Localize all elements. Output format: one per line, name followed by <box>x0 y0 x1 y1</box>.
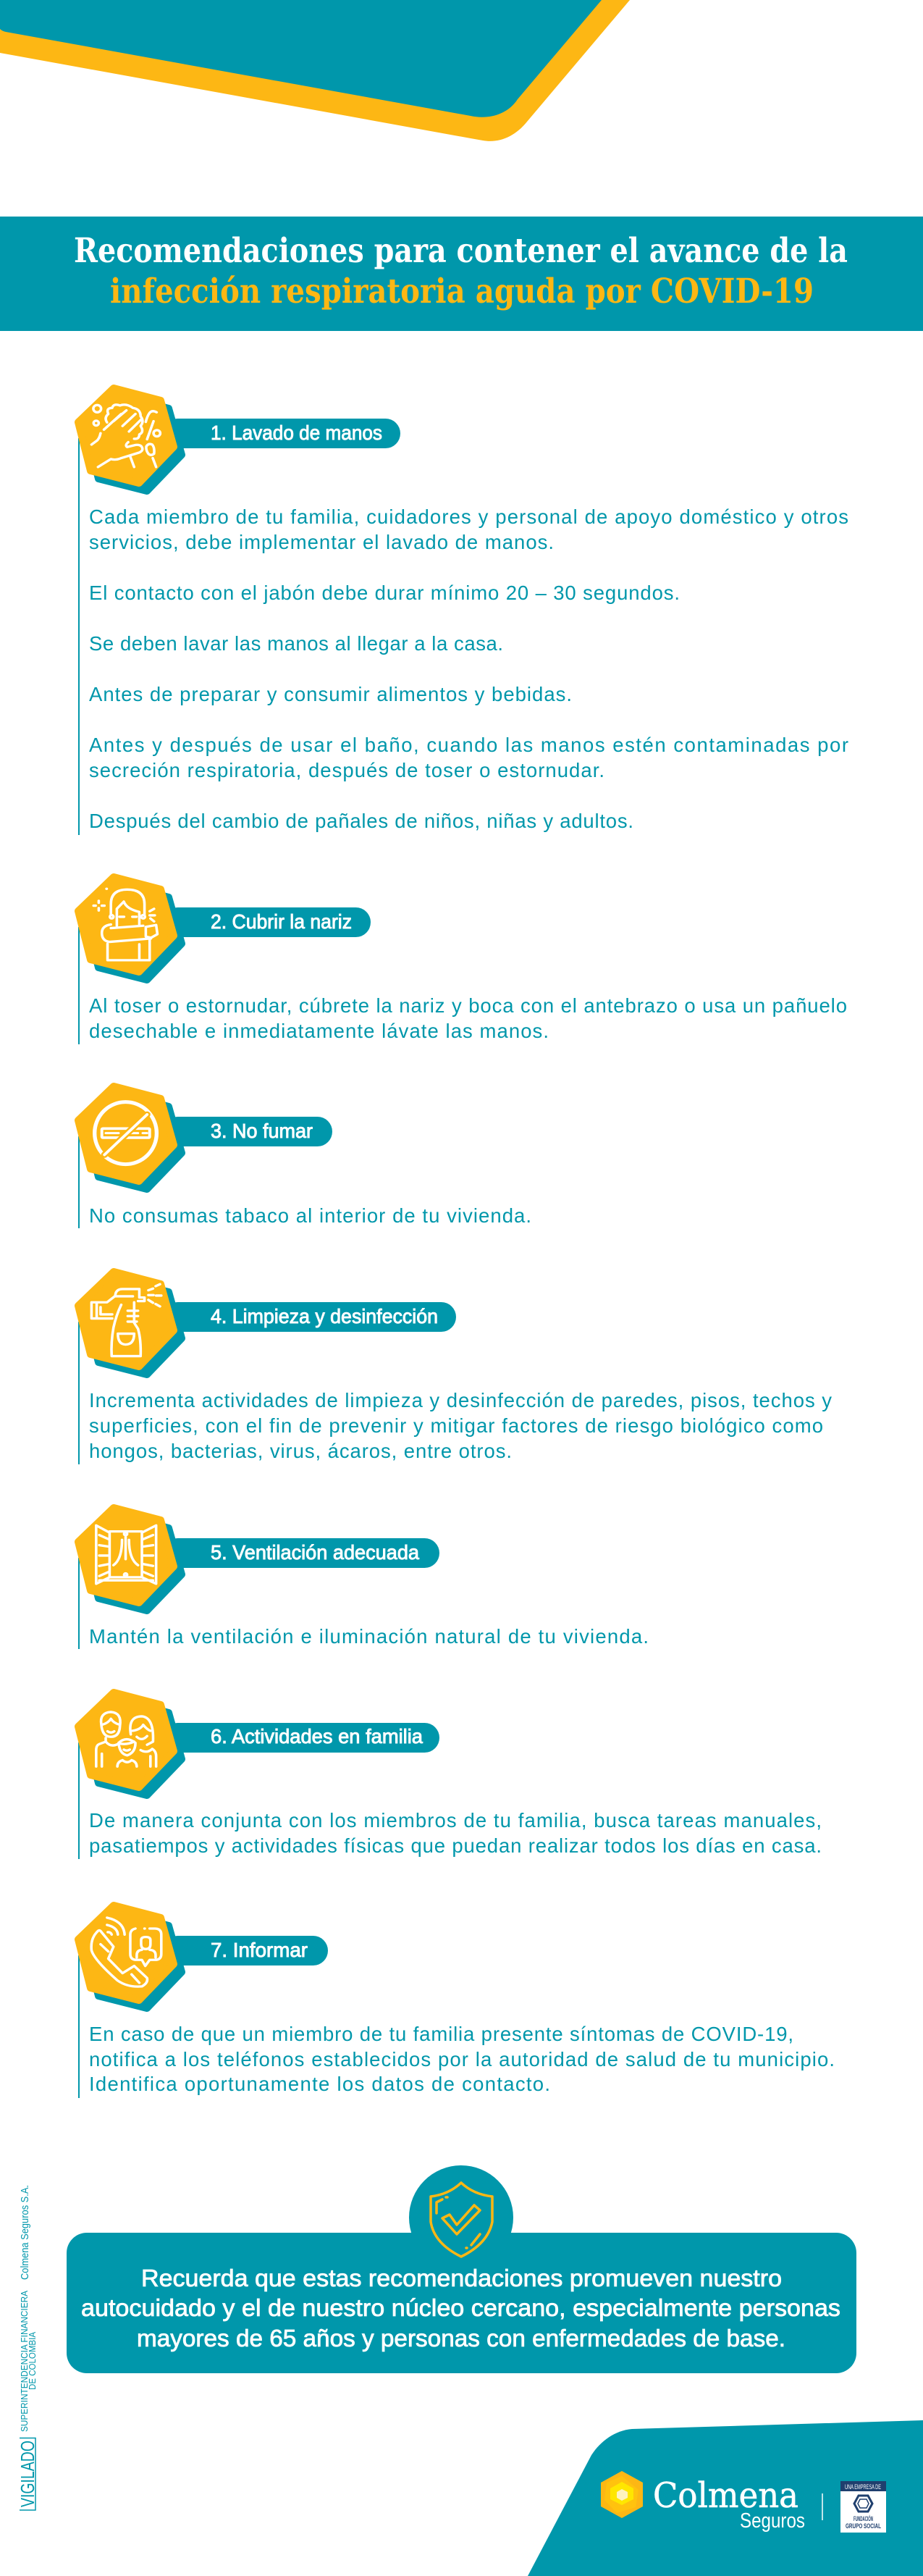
text block: Informar: notifica a los teléfonos establecidos por la autoridad de salud de tu municipio. <box>89 2048 835 2071</box>
panel: 6. Actividades en familia <box>78 1692 822 1859</box>
badge: section 1 hexagon and pill <box>78 388 400 491</box>
icon: phone and contact <box>91 1918 161 1986</box>
heading: Lavado de manos: 1. Lavado de manos <box>211 421 382 444</box>
legal text: vigilado: Colmena Seguros S.A. <box>19 2185 31 2280</box>
text block: Ventilación adecuada: Mantén la ventilación e iluminación natural de tu vivienda. <box>89 1625 649 1648</box>
icon: no smoking <box>95 1102 156 1165</box>
legal text: vigilado: VIGILADO <box>17 2441 38 2507</box>
panel: 5. Ventilación adecuada <box>78 1508 649 1649</box>
text block: Informar: Identifica oportunamente los datos de contacto. <box>89 2073 550 2095</box>
decorative top corner shape <box>0 0 630 141</box>
text block: Limpieza y desinfección: hongos, bacterias, virus, ácaros, entre otros. <box>89 1440 512 1462</box>
badge: section 5 hexagon and pill <box>78 1508 439 1611</box>
callout: closing reminder <box>67 2165 856 2373</box>
text block: Cubrir la nariz: Al toser o estornudar, cúbrete la nariz y boca con el antebrazo o usa un pañuelo <box>89 994 847 1017</box>
text block: Informar: En caso de que un miembro de tu familia presente síntomas de COVID-19, <box>89 2023 793 2045</box>
text block: Actividades en familia: pasatiempos y actividades físicas que puedan realizar todos los días en casa. <box>89 1834 822 1857</box>
text block: Cubrir la nariz <box>89 994 847 1042</box>
text block: Lavado de manos: servicios, debe implementar el lavado de manos. <box>89 531 554 553</box>
text block: Limpieza y desinfección <box>89 1389 832 1462</box>
text block: Lavado de manos <box>89 505 848 832</box>
text block: Actividades en familia <box>89 1809 822 1857</box>
logo: Fundación Grupo Social <box>840 2481 886 2533</box>
logo: Fundación Grupo Social: FUNDACIÓN <box>854 2514 873 2522</box>
text block: Informar <box>89 2023 835 2095</box>
icon: spray bottle <box>91 1284 161 1356</box>
logo: Colmena Seguros <box>601 2471 805 2533</box>
heading: Ventilación adecuada: 5. Ventilación adecuada <box>211 1541 420 1564</box>
icon: family <box>96 1712 156 1766</box>
logo: Fundación Grupo Social: UNA EMPRESA DE <box>845 2483 881 2491</box>
icon: open window <box>96 1525 156 1584</box>
legal text: vigilado: DE COLOMBIA <box>28 2331 38 2390</box>
text block: Lavado de manos: secreción respiratoria, después de toser o estornudar. <box>89 759 604 781</box>
heading: Actividades en familia: 6. Actividades en familia <box>211 1725 423 1748</box>
title banner: infección respiratoria aguda por COVID-19 <box>110 272 814 311</box>
text block: Lavado de manos: Después del cambio de pañales de niños, niñas y adultos. <box>89 810 633 832</box>
text block: Lavado de manos: El contacto con el jabón debe durar mínimo 20 – 30 segundos. <box>89 582 680 604</box>
panel: 7. Informar <box>78 1905 835 2098</box>
footer corner with logos <box>528 2420 923 2576</box>
text block: No fumar: No consumas tabaco al interior de tu vivienda. <box>89 1204 531 1227</box>
text block: Limpieza y desinfección: superficies, con el fin de prevenir y mitigar factores de riesgo biológico como <box>89 1414 823 1437</box>
badge: section 7 hexagon and pill <box>78 1905 328 2008</box>
heading: Limpieza y desinfección: 4. Limpieza y desinfección <box>211 1305 438 1327</box>
text block: reminder message: autocuidado y el de nuestro núcleo cercano, especialmente personas <box>81 2294 840 2321</box>
logo: Colmena Seguros: Colmena <box>653 2475 798 2516</box>
text block: Cubrir la nariz: desechable e inmediatamente lávate las manos. <box>89 1020 549 1042</box>
legal text: vigilado: SUPERINTENDENCIA FINANCIERA <box>20 2290 30 2432</box>
icon: shield with check <box>431 2183 492 2257</box>
text block: reminder message <box>81 2265 840 2351</box>
text block: Lavado de manos: Antes de preparar y consumir alimentos y bebidas. <box>89 683 572 705</box>
logo: Colmena Seguros: Seguros <box>740 2509 805 2533</box>
badge: section 4 hexagon and pill <box>78 1272 456 1375</box>
icon: washing hands <box>91 405 160 467</box>
text block: Actividades en familia: De manera conjunta con los miembros de tu familia, busca tareas manuales, <box>89 1809 822 1832</box>
text block: Limpieza y desinfección: Incrementa actividades de limpieza y desinfección de paredes, pisos, techos y <box>89 1389 832 1411</box>
heading: Cubrir la nariz: 2. Cubrir la nariz <box>211 910 352 933</box>
panel: 1. Lavado de manos <box>78 388 848 835</box>
panel: 4. Limpieza y desinfección <box>78 1272 832 1464</box>
text block: reminder message: Recuerda que estas recomendaciones promueven nuestro <box>141 2265 782 2291</box>
badge: section 6 hexagon and pill <box>78 1692 439 1795</box>
panel: 2. Cubrir la nariz <box>78 877 847 1044</box>
heading: No fumar: 3. No fumar <box>211 1120 313 1142</box>
panel: 3. No fumar <box>78 1086 531 1228</box>
icon: person covering nose <box>93 889 157 960</box>
text block: Lavado de manos: Antes y después de usar el baño, cuando las manos estén contaminadas por <box>89 734 848 756</box>
badge: section 2 hexagon and pill <box>78 877 371 980</box>
text block: reminder message: mayores de 65 años y personas con enfermedades de base. <box>137 2325 785 2351</box>
title banner <box>0 217 923 331</box>
badge: section 3 hexagon and pill <box>78 1086 332 1189</box>
text block: Lavado de manos: Cada miembro de tu familia, cuidadores y personal de apoyo doméstico y otros <box>89 505 848 528</box>
text block: Lavado de manos: Se deben lavar las manos al llegar a la casa. <box>89 632 503 655</box>
legal text: vigilado <box>17 2185 38 2510</box>
heading: Informar: 7. Informar <box>211 1939 308 1961</box>
logo: Fundación Grupo Social: GRUPO SOCIAL <box>846 2522 881 2530</box>
